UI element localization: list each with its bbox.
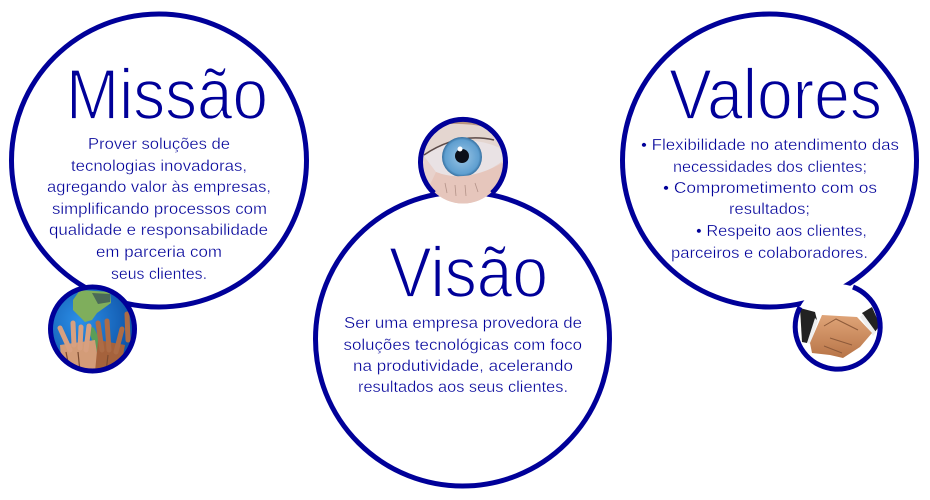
icon: handshake [795,284,881,370]
icon: globe with hands [50,287,134,372]
text block: Missão body: simplificando processos com [52,201,267,218]
text block: Valores body: • Respeito aos clientes, [696,223,867,240]
text block: Missão body: tecnologias inovadoras, [71,158,247,175]
text block: Valores body [641,137,899,262]
icon: blue eye [420,118,508,206]
text block: Missão body: seus clientes. [111,266,207,283]
text block: Visão body: na produtividade, acelerando [353,358,573,375]
text block: Valores body: • Comprometimento com os [663,180,877,197]
ring: eye top arc [420,119,506,193]
circle: Missão outline [12,14,306,307]
text block: Visão body: Ser uma empresa provedora de [344,315,582,332]
text block: Missão body: em parceria com [96,244,222,261]
heading: Valores: Valores [669,56,882,135]
circle: Valores outline [622,14,916,307]
panel: Valores [622,14,916,307]
text block: Valores body: resultados; [729,201,810,218]
text block: Missão body: Prover soluções de [88,136,230,153]
panel: Missão [12,14,306,307]
heading: Missão: Missão [66,56,268,135]
text block: Valores body: • Flexibilidade no atendimento das [641,137,899,154]
text block: Valores body: parceiros e colaboradores. [671,245,868,262]
ring: handshake partial arc [795,287,880,369]
text block: Missão body: agregando valor às empresas, [47,179,271,196]
circle: Visão outline [316,192,610,486]
heading: Visão: Visão [389,234,548,313]
text block: Visão body: resultados aos seus clientes. [358,379,568,396]
text block: Valores body: necessidades dos clientes; [673,159,867,176]
text block: Visão body [344,315,582,396]
text block: Visão body: soluções tecnológicas com foco [344,337,582,354]
panel: Visão [316,192,610,486]
text block: Missão body: qualidade e responsabilidade [49,222,268,239]
ring: globe outline [50,287,134,371]
text block: Missão body [47,136,271,283]
